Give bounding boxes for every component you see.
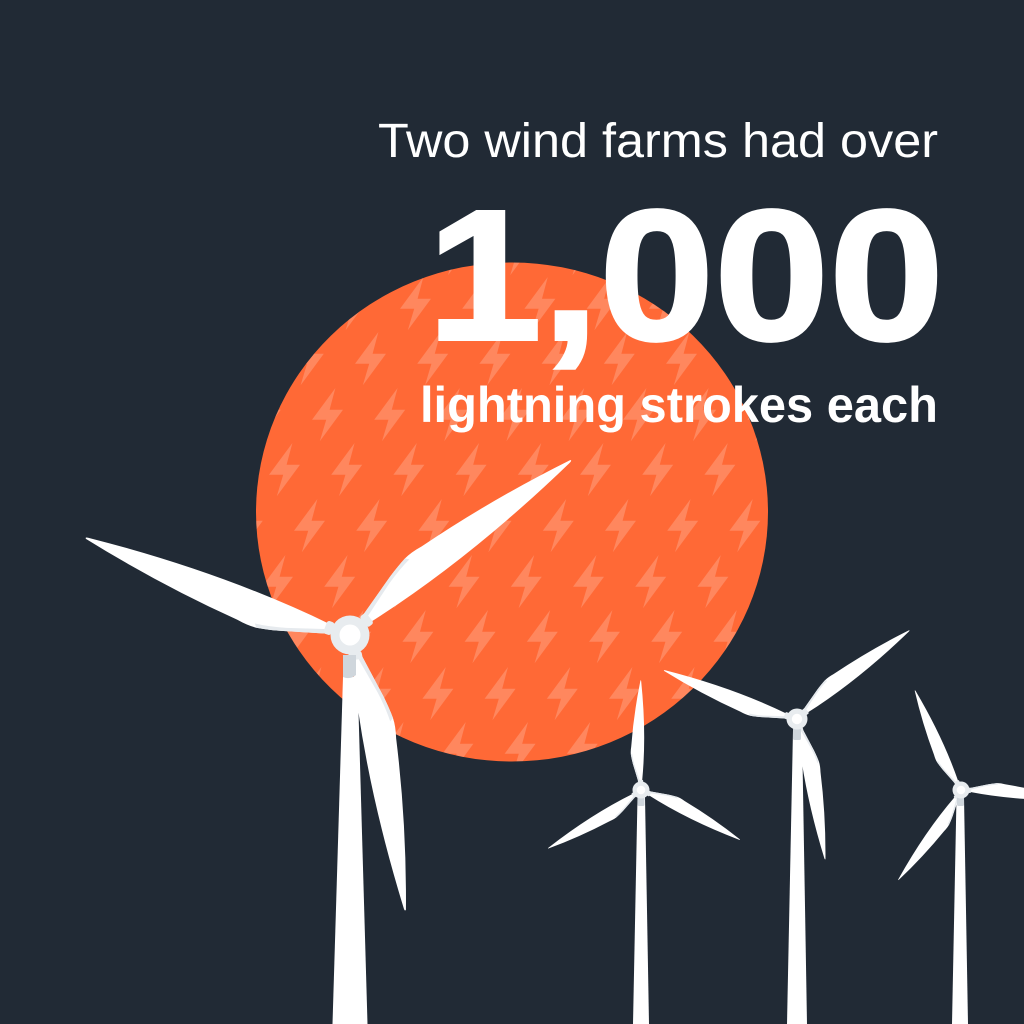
wind turbine: small right bbox=[895, 689, 1024, 1024]
wind turbine: small left bbox=[546, 680, 745, 1024]
heading: big number: 1,000 bbox=[427, 172, 944, 380]
heading: closing line: lightning strokes each bbox=[420, 377, 938, 433]
wind turbine: medium bbox=[659, 620, 912, 1024]
heading: intro line: Two wind farms had over bbox=[378, 115, 938, 168]
wind turbine: large bbox=[77, 440, 577, 1024]
orange circle with lightning pattern bbox=[256, 262, 768, 762]
